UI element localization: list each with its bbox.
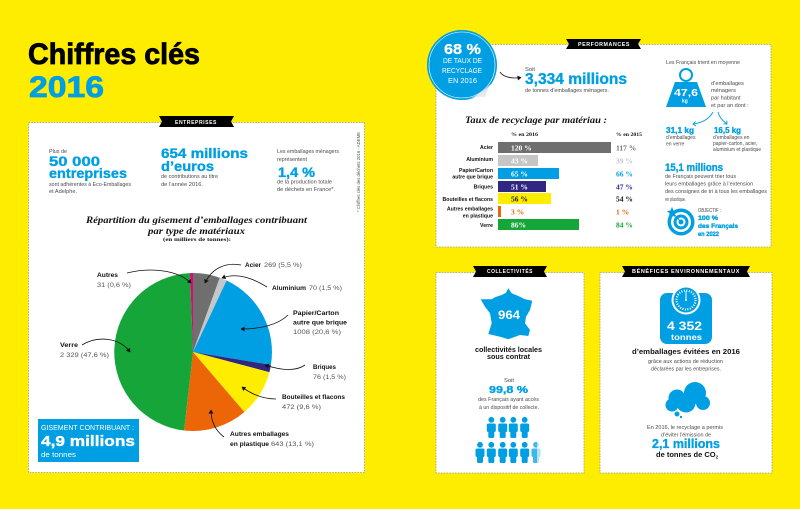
icon: map of France 964 <box>481 288 532 339</box>
pie labels: en plastique <box>230 442 270 448</box>
pie labels: Autres emballages <box>230 432 290 438</box>
icon: target <box>667 207 694 236</box>
callout: gisement contribuant: 4,9 millions <box>41 434 135 450</box>
stat: 2,1 millions CO2: 2,1 millions <box>652 436 720 451</box>
stat: 50 000 entreprises: et Adelphe. <box>49 189 77 195</box>
heading: taux de recyclage: Taux de recyclage par matériau : <box>465 115 607 125</box>
callout: gisement contribuant: de tonnes <box>41 452 77 459</box>
banner: bénéfices environnementaux <box>622 266 750 277</box>
panel: performances <box>427 30 771 247</box>
bar chart: taux de recyclage: 84 % <box>616 220 633 230</box>
chart heading <box>85 215 308 243</box>
icon: weight 47,6 kg: 47,6 <box>674 88 699 99</box>
bar chart: taux de recyclage: % en 2015 <box>616 132 642 138</box>
callout: gisement contribuant <box>38 419 139 462</box>
stat: 1,4 %: de la production totale <box>277 180 332 186</box>
text: par habitant: et par an dont : <box>711 103 749 109</box>
stat: 16,5 kg <box>713 126 761 153</box>
source note: * Chiffres clés des déchets 2016 - ADEME <box>356 132 361 212</box>
bar chart: taux de recyclage: 56 % <box>511 194 528 204</box>
text: par habitant: par habitant <box>711 96 741 102</box>
bar chart: taux de recyclage: 54 % <box>616 194 633 204</box>
pie labels: 643 (13,1 %) <box>271 442 314 448</box>
banner: collectivités <box>473 266 547 277</box>
stat: 16,5 kg: aluminium et plastique <box>713 147 761 153</box>
banner: entreprises: ENTREPRISES <box>175 120 217 126</box>
badge: 68 %: 68 % <box>444 41 481 58</box>
bar chart: taux de recyclage: 65 % <box>511 170 528 178</box>
stat: 15,1 millions: des consignes de tri à tous les emballages <box>665 189 767 195</box>
stat: 2,1 millions CO2: En 2016, le recyclage a permis <box>647 425 723 431</box>
bar chart: taux de recyclage: Papier/Carton <box>459 168 493 174</box>
pie labels: Briques <box>313 365 337 371</box>
badge: 68 %: DE TAUX DE <box>443 58 482 65</box>
stat: 50 000 entreprises: Plus de <box>49 149 67 155</box>
bar chart: taux de recyclage: 1 % <box>616 208 629 216</box>
icon: weight 47,6 kg <box>666 69 706 107</box>
stat: 31,1 kg: en verre <box>666 142 685 148</box>
text: par habitant: d’emballages <box>711 81 744 87</box>
bar chart: taux de recyclage: 66 % <box>616 170 633 178</box>
callout: gisement contribuant: GISEMENT CONTRIBUANT : <box>41 425 134 432</box>
stat: 1,4 %: Les emballages ménagers <box>277 149 339 155</box>
stat: 654 millions d'euros: de contributions au titre <box>161 174 218 180</box>
pie labels: 31 (0,6 %) <box>97 283 131 289</box>
stat: 50 000 entreprises: 50 000 <box>49 153 100 169</box>
stat: 1,4 % <box>277 149 339 193</box>
icon: people <box>476 417 542 464</box>
stat: 31,1 kg <box>666 126 696 148</box>
stat: 99,8 %: à un dispositif de collecte. <box>479 405 539 411</box>
pie labels: 269 (5,5 %) <box>264 263 302 269</box>
stat: 2,1 millions CO2: d’éviter l’émission de <box>661 432 711 438</box>
stat: 3,334 millions: Soit <box>525 67 535 73</box>
pie labels: Bouteilles et flacons <box>282 395 346 401</box>
text: emballages évitées: d’emballages évitées en 2016 <box>632 347 740 356</box>
bar chart: taux de recyclage: Acier <box>480 145 493 151</box>
badge: 68 %: RECYCLAGE <box>442 68 482 75</box>
banner: entreprises <box>159 116 234 127</box>
stat: 3,334 millions: 3,334 millions <box>525 71 627 88</box>
objective text <box>698 208 738 238</box>
text: emballages évitées: grâce aux actions de réduction <box>648 359 723 365</box>
chart heading: Répartition du gisement d’emballages contribuant <box>85 215 308 225</box>
pie labels: autre que brique <box>293 320 348 326</box>
stat: 1,4 %: de déchets en France*. <box>277 187 335 193</box>
chart heading: par type de matériaux <box>147 226 246 236</box>
bar chart: taux de recyclage: Verre <box>480 223 493 229</box>
pie chart <box>114 273 272 431</box>
bar chart: taux de recyclage: 120 % <box>511 144 532 152</box>
bar chart: taux de recyclage: % en 2016 <box>511 132 538 138</box>
panel: bénéfices environnementaux <box>600 266 772 473</box>
chart heading: (en milliers de tonnes): <box>163 236 231 243</box>
stat: 50 000 entreprises: sont adhérentes à Eco-Emballages <box>49 182 131 188</box>
objective text: 100 % <box>698 215 718 222</box>
badge: 68 % <box>427 30 500 100</box>
stat: 15,1 millions <box>665 162 767 203</box>
icon: scale 4 352 tonnes <box>660 286 712 344</box>
text: collectivités locales: sous contrat <box>487 354 531 361</box>
objective text: des Français <box>698 223 738 230</box>
banner: collectivités: COLLECTIVITÉS <box>487 267 533 275</box>
bar chart: taux de recyclage: 117 % <box>616 144 636 152</box>
bar chart: taux de recyclage: 47 % <box>616 182 633 192</box>
arrow: badge to tonnage <box>500 72 521 78</box>
pie labels: 70 (1,5 %) <box>309 286 342 292</box>
stat: 654 millions d'euros: d’euros <box>161 158 214 174</box>
icon: cloud <box>666 382 710 418</box>
banner: performances: PERFORMANCES <box>578 42 630 48</box>
stat: 15,1 millions: leurs emballages grâce à l’extension <box>665 182 753 188</box>
bar chart: taux de recyclage: autre que brique <box>452 174 493 180</box>
bar chart: taux de recyclage: 51 % <box>511 182 528 192</box>
stat: 2,1 millions CO2: 2 <box>716 454 719 460</box>
bar chart: taux de recyclage: Bouteilles et flacons <box>443 197 493 203</box>
objective text: en 2022 <box>698 231 719 238</box>
stat: 1,4 %: représentent <box>277 157 307 163</box>
stat: 99,8 %: Soit <box>504 378 514 384</box>
pie labels: Aluminium <box>272 286 306 292</box>
banner: bénéfices environnementaux: BÉNÉFICES ENVIRONNEMENTAUX <box>632 267 740 275</box>
pie labels: Autres <box>97 273 119 279</box>
text: collectivités locales: collectivités locales <box>475 347 542 354</box>
bar chart: taux de recyclage <box>443 132 642 230</box>
banner: performances <box>566 39 641 49</box>
stat: 15,1 millions: 15,1 millions <box>665 162 723 174</box>
bar chart: taux de recyclage: 3 % <box>511 208 524 216</box>
stat: 16,5 kg: d’emballages en <box>713 135 750 141</box>
stat: 31,1 kg: d’emballages <box>666 135 696 141</box>
stat: 99,8 % <box>478 378 539 411</box>
stat: 31,1 kg: 31,1 kg <box>666 126 694 135</box>
stat: 50 000 entreprises: entreprises <box>49 165 127 181</box>
text: emballages évitées <box>632 347 740 372</box>
stat: 654 millions d'euros <box>161 145 248 188</box>
title: Chiffres clés <box>28 38 200 71</box>
text: collectivités locales <box>475 347 542 361</box>
bar chart: taux de recyclage: Briques <box>474 184 493 190</box>
icon: scale 4 352 tonnes: 4 352 <box>667 319 702 333</box>
bar chart: taux de recyclage: 39 % <box>616 156 633 166</box>
bar chart: taux de recyclage: Aluminium <box>466 157 493 163</box>
arrows: split <box>693 112 727 126</box>
stat: 3,334 millions <box>525 67 627 94</box>
stat: 654 millions d'euros: de l’année 2016. <box>161 182 203 188</box>
pie labels: 76 (1,5 %) <box>313 375 346 381</box>
pie labels: 2 329 (47,6 %) <box>60 353 109 359</box>
stat: 50 000 entreprises <box>49 149 131 195</box>
badge: 68 %: EN 2016 <box>448 78 477 85</box>
stat: 15,1 millions: de Français peuvent trier tous <box>665 174 736 180</box>
icon: scale 4 352 tonnes: tonnes <box>671 333 703 342</box>
icon: map of France 964: 964 <box>498 308 520 322</box>
title: 2016 <box>29 71 104 104</box>
bar chart: taux de recyclage: en plastique <box>463 214 493 220</box>
bar chart: taux de recyclage: 86% <box>511 220 526 230</box>
pie labels: Papier/Carton <box>293 311 339 317</box>
pie arrows <box>82 264 305 437</box>
pie labels: Acier <box>245 263 262 269</box>
stat: 99,8 %: 99,8 % <box>489 384 529 396</box>
stat: 654 millions d'euros: 654 millions <box>161 145 248 161</box>
objective text: OBJECTIF : <box>698 208 721 214</box>
text: par habitant <box>711 81 749 109</box>
pie labels: Verre <box>60 343 79 349</box>
stat: 99,8 %: des Français ayant accès <box>478 397 539 403</box>
stat: 2,1 millions CO2: de tonnes de CO <box>656 450 716 459</box>
stat: 15,1 millions: en plastique. <box>665 197 686 203</box>
stat: 3,334 millions: de tonnes d’emballages ménagers. <box>525 88 609 94</box>
panel: entreprises <box>28 116 364 472</box>
stat: 16,5 kg: 16,5 kg <box>714 126 741 135</box>
title <box>28 38 200 104</box>
stat: 1,4 %: 1,4 % <box>278 164 316 180</box>
pie labels: 472 (9,6 %) <box>282 405 321 411</box>
panel: collectivités <box>436 266 584 473</box>
stat: 16,5 kg: papier-carton, acier, <box>713 141 757 147</box>
pie labels <box>60 263 348 448</box>
text: par habitant: ménagers <box>711 88 736 94</box>
bar chart: taux de recyclage: Autres emballages <box>447 206 493 212</box>
bar chart: taux de recyclage: 43 % <box>511 156 528 166</box>
icon: weight 47,6 kg: kg <box>682 98 688 104</box>
text: emballages évitées: déclarées par les entreprises. <box>651 366 721 372</box>
intro text: moyenne: Les Français trient en moyenne <box>666 60 740 66</box>
pie labels: 1008 (20,6 %) <box>293 330 341 336</box>
stat: 2,1 millions CO2 <box>647 425 723 460</box>
